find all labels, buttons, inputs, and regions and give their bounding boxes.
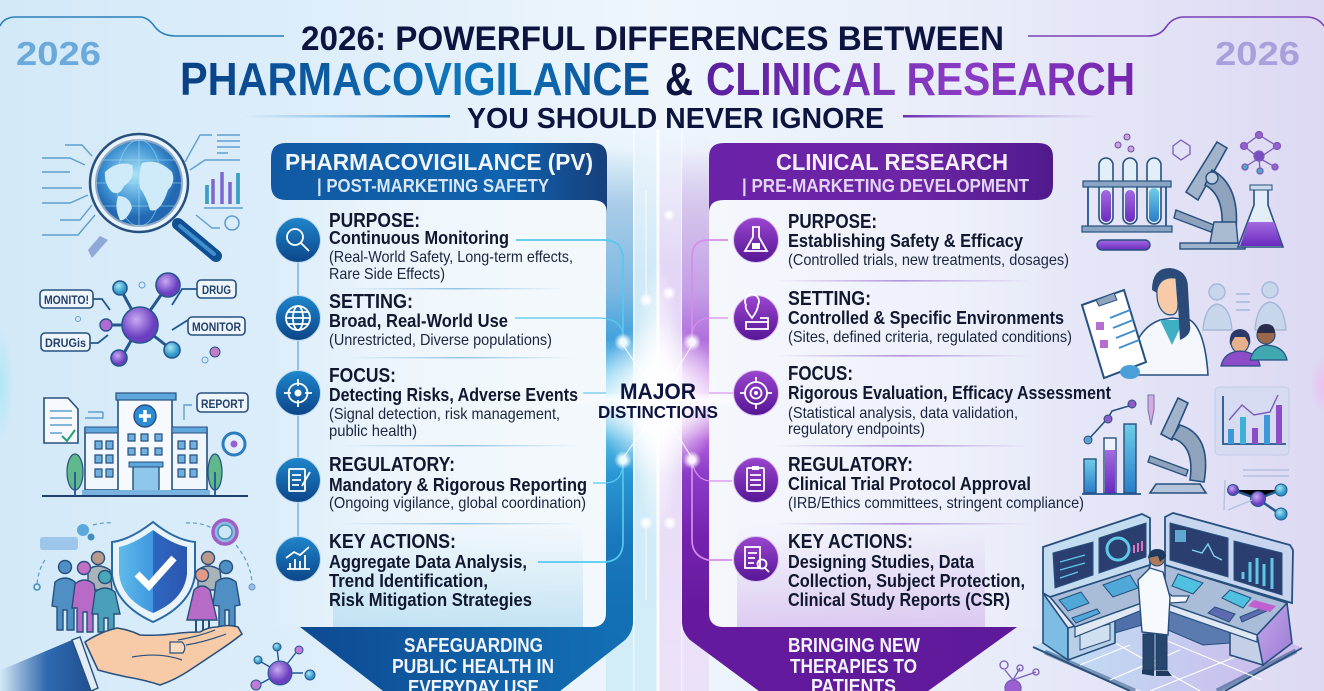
scientist	[1138, 549, 1189, 676]
connector nodes: left	[614, 190, 653, 600]
year badge right: 2026	[1215, 35, 1300, 72]
icon: document search	[734, 536, 778, 582]
illustration: globe and magnifier	[42, 134, 243, 258]
floor	[1033, 620, 1302, 691]
central glow	[548, 260, 768, 540]
label: DRUGis: DRUGis	[45, 336, 86, 350]
text: CR key actions: KEY ACTIONS:	[788, 531, 913, 553]
icon: target	[276, 370, 320, 416]
header: PHARMACOVIGILANCE (PV)	[285, 149, 593, 175]
illustration: chart panel	[1215, 387, 1289, 455]
text: PV regulatory: REGULATORY:	[329, 454, 455, 476]
connector lines: left	[515, 240, 623, 562]
center column bands	[606, 130, 709, 691]
text: CR setting	[788, 288, 1072, 346]
illustration: hospital	[42, 393, 248, 496]
side band and arrow	[500, 150, 633, 691]
arrow label: SAFEGUARDING	[404, 635, 543, 657]
text: CR purpose: (Controlled trials, new treatments, dosages)	[788, 252, 1069, 269]
text: PV purpose	[329, 210, 573, 283]
label: MONITO!	[40, 290, 93, 308]
text: CR setting: (Sites, defined criteria, regulated conditions)	[788, 329, 1072, 346]
arrow label: PUBLIC HEALTH IN	[392, 656, 554, 678]
text: PV focus: FOCUS:	[329, 365, 396, 387]
icon: location site	[734, 294, 778, 340]
arrow label	[788, 635, 920, 691]
left timeline spine	[297, 262, 299, 540]
icon: clipboard	[734, 458, 778, 502]
text: PV key actions: KEY ACTIONS:	[329, 531, 456, 553]
text: CR key actions	[788, 531, 1025, 610]
connector lines: right	[692, 240, 733, 560]
text: PV key actions: Risk Mitigation Strategies	[329, 589, 532, 610]
label: MONITOR	[188, 317, 245, 335]
arrow label: THERAPIES TO	[790, 656, 917, 678]
title: CLINICAL RESEARCH	[706, 53, 1135, 105]
text: PV key actions: Trend Identification,	[329, 570, 488, 591]
arrow label: BRINGING NEW	[788, 635, 920, 657]
text: CR regulatory	[788, 454, 1084, 512]
illustration: flask	[1238, 185, 1283, 247]
text: PV setting: SETTING:	[329, 291, 413, 313]
icon: trend chart	[276, 536, 320, 582]
arrow label	[392, 635, 554, 691]
title: YOU SHOULD NEVER IGNORE	[467, 103, 884, 135]
text: CR focus	[788, 363, 1111, 438]
connector nodes: right	[662, 209, 701, 530]
year badge left: 2026	[16, 35, 101, 72]
text: PV key actions: Aggregate Data Analysis,	[329, 551, 527, 572]
text: PV purpose: Rare Side Effects)	[329, 266, 445, 283]
icon: flask	[734, 218, 778, 262]
label: DRUG	[197, 280, 236, 298]
text: CR key actions: Collection, Subject Protection,	[788, 570, 1025, 591]
illustration: molecule lower right	[1224, 470, 1289, 520]
illustration: researcher with clipboard	[1082, 268, 1208, 379]
left console	[1043, 593, 1068, 660]
text: PV regulatory: Mandatory & Rigorous Reporting	[329, 474, 587, 495]
illustration: control console with scientist	[1033, 513, 1302, 691]
text: CR regulatory: REGULATORY:	[788, 454, 913, 476]
title	[180, 20, 1135, 135]
decorative frame line left	[0, 17, 284, 36]
text: CR purpose: PURPOSE:	[788, 211, 877, 233]
illustration: shield, people and hand	[0, 520, 255, 691]
text: CR regulatory: Clinical Trial Protocol Approval	[788, 473, 1031, 494]
illustration: test tubes	[1082, 134, 1172, 250]
left dividers	[340, 288, 580, 524]
text: PV setting	[329, 291, 552, 349]
illustration: small molecule left	[251, 643, 315, 690]
text: CR focus: regulatory endpoints)	[788, 421, 925, 438]
illustration: molecules top right	[1173, 132, 1280, 174]
text: PV focus	[329, 365, 578, 440]
icon: globe	[276, 296, 320, 340]
header: CLINICAL RESEARCH	[776, 149, 1008, 175]
right console	[1168, 608, 1230, 645]
label: MONITOR: MONITOR	[192, 320, 241, 334]
text: PV purpose: Continuous Monitoring	[329, 227, 509, 248]
illustration: second microscope	[1148, 398, 1206, 493]
decorative frame line right	[1028, 17, 1324, 36]
text: CR setting: Controlled & Specific Environments	[788, 307, 1064, 328]
text: PV focus: (Signal detection, risk management,	[329, 406, 560, 423]
text: CR purpose	[788, 211, 1069, 269]
panel: pharmacovigilance	[271, 143, 633, 691]
header: | PRE-MARKETING DEVELOPMENT	[742, 175, 1030, 196]
illustration: microscope	[1174, 142, 1245, 249]
center label: major distinctions: DISTINCTIONS	[598, 402, 718, 422]
header	[709, 143, 1053, 213]
text: PV purpose: PURPOSE:	[329, 210, 420, 232]
header: | POST-MARKETING SAFETY	[317, 175, 550, 196]
panel body	[710, 200, 1053, 627]
icon: target	[734, 370, 778, 416]
illustration: molecule network	[40, 273, 245, 366]
text: PV purpose: (Real-World Safety, Long-term effects,	[329, 249, 573, 266]
panel body	[271, 200, 606, 627]
label: MONITO!: MONITO!	[44, 293, 89, 307]
panel: clinical research	[682, 143, 1053, 691]
right dividers	[775, 280, 1030, 525]
illustration: bar chart with trend	[1082, 395, 1154, 494]
title: &	[665, 53, 693, 105]
title: PHARMACOVIGILANCE	[180, 53, 650, 105]
text: PV key actions	[329, 531, 532, 610]
center label: major distinctions	[598, 379, 718, 422]
icon: magnifier	[276, 218, 320, 262]
text: CR setting: SETTING:	[788, 288, 871, 310]
label: REPORT: REPORT	[201, 397, 245, 411]
text: PV focus: Detecting Risks, Adverse Events	[329, 384, 578, 405]
text: CR key actions: Designing Studies, Data	[788, 551, 975, 572]
text: PV setting: (Unrestricted, Diverse populations)	[329, 332, 552, 349]
text: PV regulatory	[329, 454, 587, 512]
text: PV setting: Broad, Real-World Use	[329, 310, 508, 331]
text: PV focus: public health)	[329, 423, 417, 440]
icon: report	[276, 458, 320, 502]
text: CR regulatory: (IRB/Ethics committees, stringent compliance)	[788, 495, 1084, 512]
text: CR focus: Rigorous Evaluation, Efficacy Assessment	[788, 382, 1111, 403]
text: PV regulatory: (Ongoing vigilance, global coordination)	[329, 495, 586, 512]
title: 2026: POWERFUL DIFFERENCES BETWEEN	[301, 20, 1004, 58]
label: REPORT	[197, 393, 248, 412]
text: CR focus: FOCUS:	[788, 363, 853, 385]
side band and arrow	[682, 150, 860, 691]
illustration: small molecule right	[1000, 661, 1039, 691]
text: CR purpose: Establishing Safety & Efficacy	[788, 230, 1024, 251]
text: CR focus: (Statistical analysis, data validation,	[788, 405, 1018, 422]
center label: major distinctions: MAJOR	[620, 379, 696, 404]
text: CR key actions: Clinical Study Reports (CSR)	[788, 589, 1010, 610]
illustration: people group	[1203, 282, 1287, 366]
header	[271, 143, 607, 213]
label: DRUG: DRUG	[202, 283, 231, 297]
hand	[0, 626, 242, 691]
